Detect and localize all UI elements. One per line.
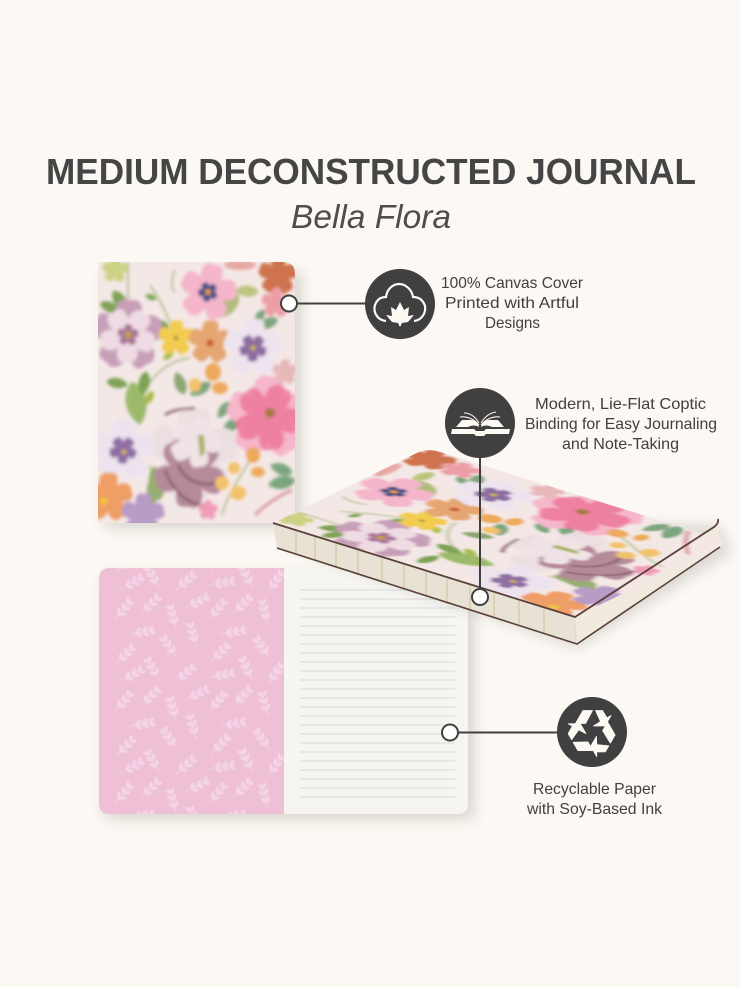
open journal bbox=[99, 568, 478, 824]
upper cover edge bbox=[273, 519, 718, 617]
caption: and Note-Taking bbox=[562, 436, 679, 453]
icon: open book bbox=[445, 388, 515, 458]
caption: Modern, Lie-Flat Coptic bbox=[535, 396, 706, 413]
caption: Printed with Artful bbox=[445, 295, 579, 312]
title: MEDIUM DECONSTRUCTED JOURNAL bbox=[46, 151, 696, 192]
marker dot bbox=[442, 724, 458, 740]
caption bbox=[441, 275, 584, 332]
marker dot bbox=[472, 589, 488, 605]
marker dot bbox=[281, 296, 297, 312]
lined page bbox=[284, 568, 468, 814]
page block: spine side bbox=[273, 524, 575, 644]
caption: 100% Canvas Cover bbox=[441, 275, 584, 292]
front cover journal bbox=[82, 255, 315, 538]
callout: coptic binding bbox=[445, 388, 717, 605]
inside cover with leaf pattern bbox=[99, 568, 284, 814]
caption bbox=[526, 781, 663, 818]
icon: recycling arrows bbox=[557, 697, 627, 767]
connector line bbox=[289, 302, 370, 304]
callout: recyclable paper bbox=[442, 697, 663, 818]
lower cover edge bbox=[277, 547, 720, 644]
caption: Designs bbox=[485, 315, 540, 332]
icon: cotton boll bbox=[365, 269, 435, 339]
caption: with Soy-Based Ink bbox=[526, 801, 663, 818]
caption bbox=[525, 396, 717, 453]
page block: fore-edge side bbox=[575, 525, 720, 644]
connector line bbox=[450, 732, 560, 734]
caption: Binding for Easy Journaling bbox=[525, 416, 717, 433]
subtitle: Bella Flora bbox=[291, 198, 451, 235]
connector line bbox=[479, 450, 481, 590]
callout: canvas cover bbox=[281, 269, 584, 339]
caption: Recyclable Paper bbox=[533, 781, 657, 798]
coptic bound journal bbox=[252, 438, 740, 648]
floral top cover bbox=[252, 438, 740, 629]
